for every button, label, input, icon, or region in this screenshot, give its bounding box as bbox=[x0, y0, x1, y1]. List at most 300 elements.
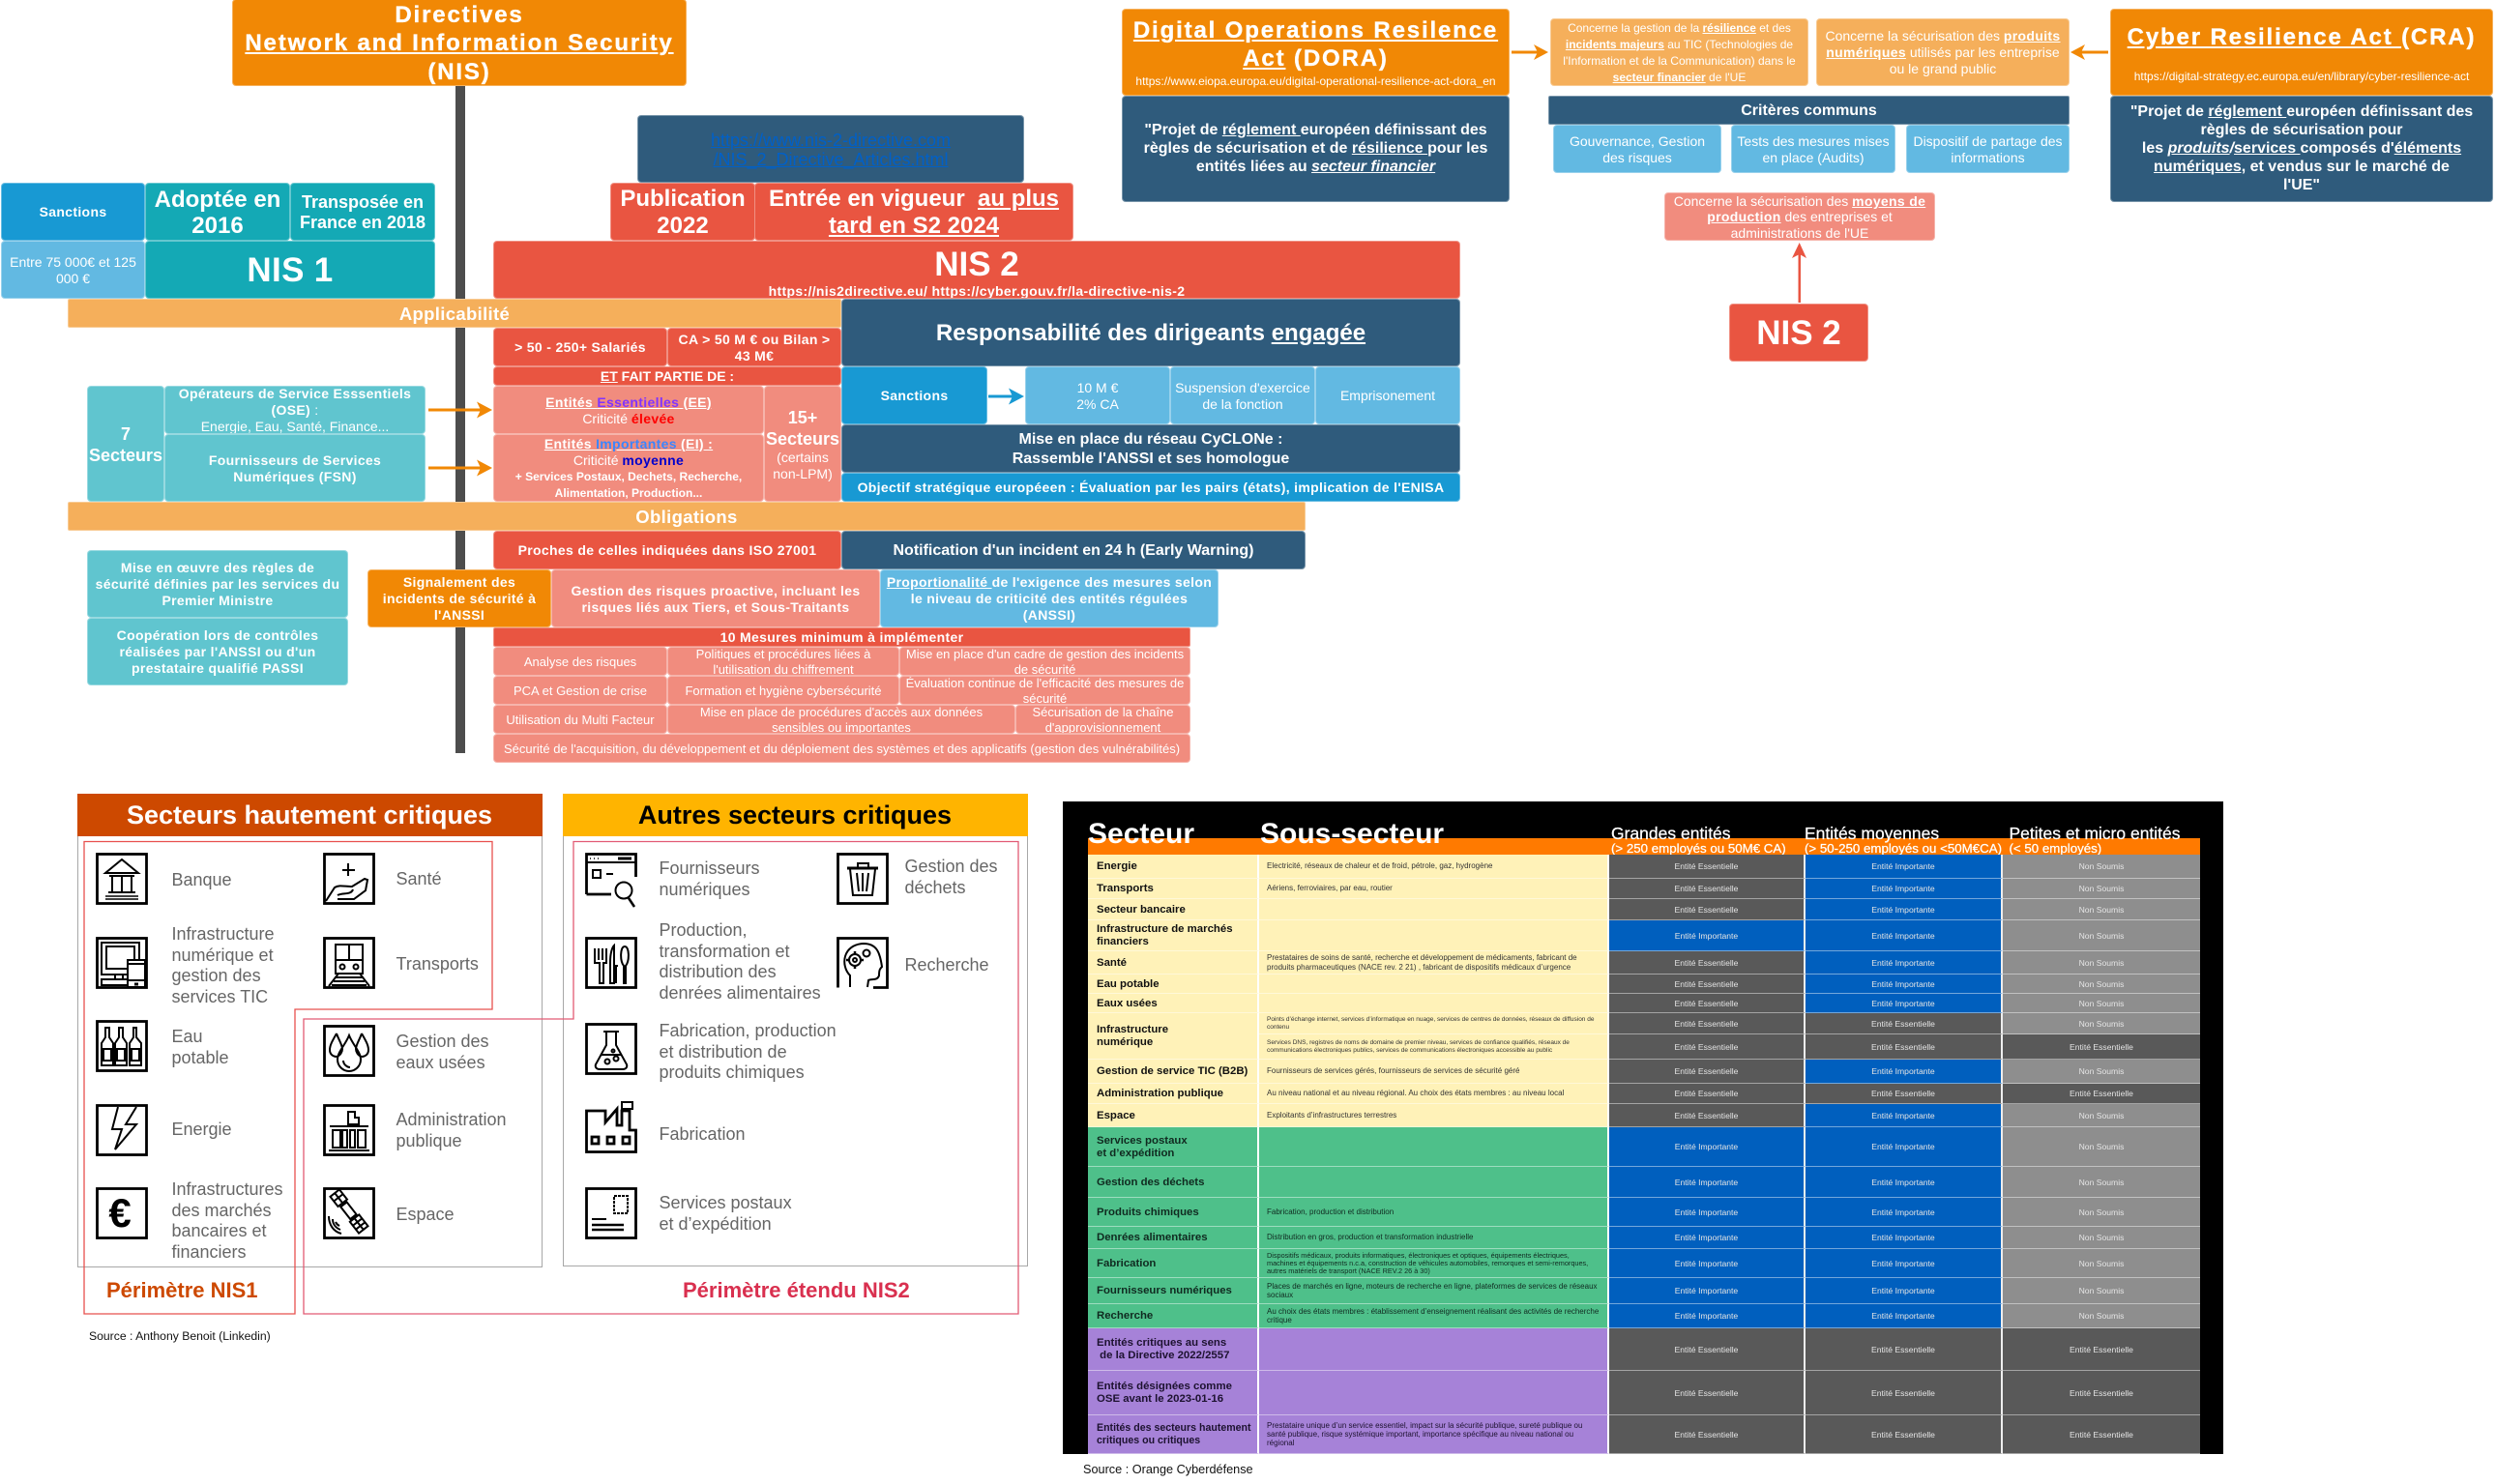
label: food production: distribution des bbox=[660, 962, 777, 981]
measure 4: PCA et Gestion de crise bbox=[514, 683, 647, 698]
CyCLONe network: Rassemble l'ANSSI et ses homologue bbox=[1013, 451, 1289, 466]
measure 10: Sécurité de l'acquisition, du développement et du déploiement des systèmes et des applicatifs (gestion des vulnérabilités) bbox=[504, 741, 1180, 756]
NIS 1 sanction amount: Entre 75 000€ et 125 000 € bbox=[10, 253, 136, 286]
NIS 2 badge bbox=[1729, 304, 1868, 362]
row: banking: Entité Importante bbox=[1871, 905, 1935, 915]
panel heading bbox=[563, 793, 1027, 835]
header: medium entities: (> 50-250 employés ou <50M€CA) bbox=[1805, 841, 2002, 856]
arrow: FSN to important entities bbox=[428, 460, 492, 476]
row: critical entities: Entité Essentielle bbox=[2070, 1344, 2133, 1353]
obligation: ANSSI controls: Coopération lors de contrôles bbox=[117, 627, 318, 643]
outline: NIS2 extended scope bbox=[304, 841, 1018, 1314]
row: designated OSE: Entités désignées comme bbox=[1097, 1381, 1232, 1392]
row: energy: Non Soumis bbox=[2079, 861, 2124, 871]
row: digital providers: Entité Importante bbox=[1871, 1286, 1935, 1295]
measure 1: Analyse des risques bbox=[524, 654, 636, 669]
OSE: Energie, Eau, Santé, Finance... bbox=[201, 419, 389, 434]
header: sector: Secteur bbox=[1088, 818, 1194, 850]
label: food production bbox=[660, 920, 821, 1003]
NIS 2 sanctions heading: Sanctions bbox=[881, 388, 948, 403]
row: financial market infrastructure: Non Soumis bbox=[2079, 930, 2124, 940]
strategic objective bbox=[841, 473, 1460, 502]
icon: factory bbox=[585, 1101, 637, 1153]
row: postal services: Services postaux bbox=[1097, 1135, 1188, 1147]
DORA description bbox=[1122, 96, 1510, 202]
measure 10 bbox=[493, 734, 1190, 763]
row: drinking water: Non Soumis bbox=[2079, 978, 2124, 988]
obligation: risk management: risques liés aux Tiers, et Sous-Traitants bbox=[581, 599, 850, 615]
label: financial infrastructures bbox=[172, 1179, 283, 1262]
icon: computer bbox=[96, 937, 148, 989]
obligation: PM rules: sécurité définies par les services du bbox=[96, 576, 339, 592]
CyCLONe network bbox=[841, 424, 1460, 473]
row: waste: Entité Importante bbox=[1675, 1178, 1738, 1187]
sanction: suspension: Suspension d'exercice de la fonction bbox=[1175, 379, 1310, 412]
FSN bbox=[164, 434, 426, 502]
CRA scope: numériques utilisés par les entreprise bbox=[1826, 44, 2060, 60]
row: critical sector entities: Entité Essentielle bbox=[1871, 1429, 1935, 1439]
important entities: Entités Importantes (EI) : bbox=[544, 435, 713, 451]
link box: NIS 2 articles: /NIS_2_Directive_Articles.html bbox=[713, 149, 949, 168]
label: NIS1 scope: Périmètre NIS1 bbox=[106, 1278, 258, 1302]
important entities: + Services Postaux, Dechets, Recherche, bbox=[515, 470, 742, 483]
row: health: Prestataires de soins de santé, recherche et développement de médicaments, fabricant de produits pharmaceutiques (NACE rev. 2 21) , fabricant de dispositifs médicaux d’urgence bbox=[1267, 953, 1577, 971]
NIS 2 badge: NIS 2 bbox=[1756, 313, 1841, 352]
applicability: and belongs to bbox=[493, 366, 841, 386]
obligation: ANSSI controls: réalisées par l'ANSSI ou d'un bbox=[120, 644, 315, 659]
NIS 1 sanction amount bbox=[1, 241, 145, 299]
label: digital infrastructure: gestion des bbox=[172, 966, 261, 985]
15+ sectors: (certains bbox=[777, 449, 829, 464]
row: chemicals bbox=[1088, 1198, 2200, 1227]
row: transport bbox=[1088, 879, 2200, 899]
obligation: proportionality: le niveau de criticité des entités régulées bbox=[911, 591, 1188, 606]
row: food: Denrées alimentaires bbox=[1097, 1232, 1208, 1243]
arrow: OSE to essential entities bbox=[428, 402, 492, 418]
label: financial infrastructures: Infrastructures bbox=[172, 1179, 283, 1199]
measure 9 bbox=[1015, 705, 1190, 734]
header: large entities bbox=[1611, 824, 1786, 856]
row: ICT management: Non Soumis bbox=[2079, 1066, 2124, 1076]
DORA heading: Act (DORA) bbox=[1243, 45, 1389, 72]
row: digital infrastructure 1 bbox=[1088, 1013, 2200, 1060]
row: waste: Non Soumis bbox=[2079, 1178, 2124, 1187]
row: food: Entité Importante bbox=[1871, 1233, 1935, 1242]
row: health: Entité Importante bbox=[1871, 957, 1935, 967]
row: transport: Aériens, ferroviaires, par eau, routier bbox=[1267, 884, 1393, 892]
criterion: sharing bbox=[1906, 125, 2070, 173]
row: chemicals: Non Soumis bbox=[2079, 1207, 2124, 1216]
banner: Applicabilité bbox=[68, 299, 841, 328]
15+ sectors bbox=[764, 386, 841, 502]
row: research: Entité Importante bbox=[1871, 1311, 1935, 1321]
row: manufacturing: Dispositifs médicaux, produits informatiques, électroniques et optiques, équipements électriques, machines et équipements n.c.a, construction de véhicules automobiles, remorques et semi-remorques, autres matériels de transport (NACE REV.2 26 à 30) bbox=[1267, 1251, 1588, 1274]
row: ICT management: Fournisseurs de services gérés, fournisseurs de services de sécurité géré bbox=[1267, 1066, 1519, 1075]
sanction: fine: 2% CA bbox=[1076, 396, 1119, 412]
row: postal services bbox=[1088, 1127, 2200, 1167]
icon: trash bin bbox=[837, 853, 889, 905]
15+ sectors: non-LPM) bbox=[773, 466, 833, 481]
panel heading: Secteurs hautement critiques bbox=[127, 800, 492, 829]
obligation: PM rules: Mise en œuvre des règles de bbox=[121, 560, 314, 575]
row: drinking water: Entité Importante bbox=[1871, 978, 1935, 988]
row: waste water bbox=[1088, 994, 2200, 1013]
row: postal services: Entité Importante bbox=[1675, 1142, 1738, 1151]
row: digital providers: Fournisseurs numériques bbox=[1097, 1285, 1232, 1296]
CRA description: l'UE" bbox=[2283, 177, 2320, 193]
DORA heading: https://www.eiopa.europa.eu/digital-operational-resilience-act-dora_en bbox=[1135, 74, 1496, 88]
header: large entities: Grandes entités bbox=[1611, 824, 1731, 843]
sanction: suspension bbox=[1170, 366, 1315, 424]
label: waste water: eaux usées bbox=[396, 1053, 485, 1072]
row: manufacturing: Entité Importante bbox=[1675, 1259, 1738, 1268]
panel heading bbox=[77, 793, 542, 835]
DORA description: "Projet de réglement européen définissant des règles de sécurisation et de résilience pour les entités liées au secteur financier bbox=[1144, 122, 1487, 175]
criterion: audits: Tests des mesures mises en place (Audits) bbox=[1737, 133, 1890, 164]
row: critical sector entities: Entité Essentielle bbox=[1675, 1429, 1738, 1439]
label: drinking water: potable bbox=[172, 1048, 229, 1067]
row: financial market infrastructure: Entité Importante bbox=[1675, 930, 1738, 940]
NIS 1 transposition date bbox=[290, 183, 435, 241]
row: critical entities: Entité Essentielle bbox=[1675, 1344, 1738, 1353]
icon: bank bbox=[96, 853, 148, 905]
leaders responsibility bbox=[841, 299, 1460, 366]
row: waste: Gestion des déchets bbox=[1097, 1177, 1204, 1188]
row: space: Espace bbox=[1097, 1110, 1135, 1121]
row: critical entities: Entité Essentielle bbox=[1871, 1344, 1935, 1353]
label: health: Santé bbox=[396, 869, 442, 888]
row: digital infrastructure 2: Entité Essentielle bbox=[1675, 1042, 1738, 1052]
label: drinking water: Eau bbox=[172, 1027, 203, 1046]
NIS 2 scope: Concerne la sécurisation des moyens de production des entreprises et administrations de l'UE bbox=[1674, 193, 1925, 241]
row: ICT management: Entité Essentielle bbox=[1675, 1066, 1738, 1076]
applicability: turnover bbox=[667, 328, 841, 366]
row: banking bbox=[1088, 899, 2200, 920]
label: chemicals bbox=[660, 1021, 837, 1082]
label: transport: Transports bbox=[396, 954, 479, 974]
CRA scope: ou le grand public bbox=[1890, 61, 1996, 76]
panel heading: Autres secteurs critiques bbox=[638, 800, 952, 829]
row: transport: Entité Essentielle bbox=[1675, 884, 1738, 893]
header: medium entities bbox=[1805, 824, 2002, 856]
obligation: reporting to ANSSI bbox=[367, 569, 551, 627]
row: waste: Entité Importante bbox=[1871, 1178, 1935, 1187]
icon: chemistry flask bbox=[585, 1023, 637, 1075]
label: drinking water bbox=[172, 1027, 229, 1067]
row: digital infrastructure 1: Entité Essentielle bbox=[1871, 1019, 1935, 1029]
obligation: 24 h notification bbox=[841, 531, 1306, 569]
NIS 2 heading with links bbox=[493, 241, 1460, 299]
row: digital providers: Non Soumis bbox=[2079, 1286, 2124, 1295]
NIS 2 heading with links: NIS 2 bbox=[934, 246, 1019, 283]
important entities bbox=[493, 434, 764, 502]
important entities: Alimentation, Production... bbox=[555, 485, 702, 499]
row: digital providers: Places de marchés en ligne, moteurs de recherche en ligne, plateformes de services de réseaux sociaux bbox=[1267, 1282, 1598, 1299]
row: public administration: Au niveau national et au niveau régional. Au choix des états membres : au niveau local bbox=[1267, 1089, 1564, 1097]
NIS 1 heading bbox=[145, 241, 435, 299]
measure 5 bbox=[667, 676, 899, 705]
label: digital providers: numériques bbox=[660, 880, 750, 899]
row: chemicals: Fabrication, production et distribution bbox=[1267, 1208, 1394, 1216]
source: Orange Cyberdéfense: Source : Orange Cyberdéfense bbox=[1083, 1463, 1253, 1476]
CRA heading: https://digital-strategy.ec.europa.eu/en/library/cyber-resilience-act bbox=[2134, 70, 2469, 83]
row: food: Distribution en gros, production et transformation industrielle bbox=[1267, 1233, 1473, 1241]
DORA heading: Digital Operations Resilence bbox=[1133, 17, 1498, 43]
label: financial infrastructures: bancaires et bbox=[172, 1221, 267, 1240]
label: waste management bbox=[905, 857, 998, 897]
DORA scope: secteur financier de l'UE bbox=[1613, 70, 1746, 83]
row: space: Exploitants d’infrastructures terrestres bbox=[1267, 1111, 1396, 1120]
measure 5: Formation et hygiène cybersécurité bbox=[685, 683, 882, 698]
measure 7 bbox=[493, 705, 667, 734]
row: digital providers bbox=[1088, 1278, 2200, 1304]
criterion: governance: des risques bbox=[1602, 149, 1672, 164]
row: chemicals: Entité Importante bbox=[1871, 1207, 1935, 1216]
CRA description: règles de sécurisation pour bbox=[2201, 122, 2402, 138]
title: Directives NIS: Network and Information Security bbox=[245, 30, 674, 56]
row: space: Entité Essentielle bbox=[1675, 1110, 1738, 1120]
row: health: Non Soumis bbox=[2079, 957, 2124, 967]
applicability: employees: > 50 - 250+ Salariés bbox=[514, 339, 646, 355]
row: ICT management: Gestion de service TIC (B2B) bbox=[1097, 1065, 1248, 1077]
row: drinking water bbox=[1088, 975, 2200, 994]
entity classification grid bbox=[1088, 855, 2200, 1454]
measures heading bbox=[493, 627, 1190, 647]
FSN: Numériques (FSN) bbox=[233, 468, 357, 483]
row: health: Santé bbox=[1097, 957, 1127, 969]
row: banking: Entité Essentielle bbox=[1675, 905, 1738, 915]
row: space bbox=[1088, 1104, 2200, 1127]
label: digital infrastructure: Infrastructure bbox=[172, 924, 275, 944]
row: waste water: Non Soumis bbox=[2079, 998, 2124, 1007]
title: Directives NIS: Directives bbox=[395, 2, 524, 28]
row: critical entities: de la Directive 2022/2557 bbox=[1100, 1350, 1229, 1361]
row: digital infrastructure 1: Entité Essentielle bbox=[1675, 1019, 1738, 1029]
row: health bbox=[1088, 951, 2200, 975]
essential entities: Criticité élevée bbox=[582, 410, 675, 425]
DORA scope: Concerne la gestion de la résilience et des bbox=[1568, 21, 1791, 35]
CRA heading bbox=[2110, 9, 2493, 96]
row: transport: Transports bbox=[1097, 883, 1154, 894]
row: critical entities bbox=[1088, 1328, 2200, 1371]
obligation: ANSSI controls: prestataire qualifié PASSI bbox=[132, 660, 304, 676]
row: manufacturing: Fabrication bbox=[1097, 1258, 1156, 1269]
obligation: PM rules: Premier Ministre bbox=[162, 593, 273, 608]
obligation: reporting to ANSSI: incidents de sécurité à bbox=[383, 591, 536, 606]
row: critical sector entities: Entités des secteurs hautement critiques ou critiques bbox=[1097, 1422, 1251, 1446]
row: research bbox=[1088, 1304, 2200, 1328]
measure 6 bbox=[899, 676, 1190, 705]
label: space: Espace bbox=[396, 1205, 455, 1224]
criterion: governance: Gouvernance, Gestion bbox=[1570, 133, 1705, 149]
row: financial market infrastructure bbox=[1088, 920, 2200, 951]
label: bank: Banque bbox=[172, 870, 232, 889]
measures heading: 10 Mesures minimum à implémenter bbox=[720, 629, 963, 645]
icon: euro: € bbox=[108, 1190, 132, 1236]
icon: euro bbox=[96, 1187, 148, 1239]
arrow: CRA to scope bbox=[2070, 44, 2108, 60]
row: designated OSE: OSE avant le 2023-01-16 bbox=[1097, 1393, 1223, 1405]
CRA description: "Projet de réglement européen définissant des bbox=[2130, 103, 2473, 120]
DORA heading bbox=[1122, 9, 1510, 96]
NIS 1 transposition date: Transposée en France en 2018 bbox=[300, 191, 426, 232]
sanction: prison: Emprisonement bbox=[1340, 388, 1435, 403]
CRA description bbox=[2110, 96, 2493, 202]
label: digital providers: Fournisseurs bbox=[660, 858, 760, 878]
icon: cutlery bbox=[585, 937, 637, 989]
row: drinking water: Eau potable bbox=[1097, 978, 1160, 990]
row: digital infrastructure 2 bbox=[1259, 1034, 2200, 1060]
link box: NIS 2 articles bbox=[637, 115, 1024, 183]
criterion: audits bbox=[1731, 125, 1895, 173]
row: financial market infrastructure: Entité Importante bbox=[1871, 930, 1935, 940]
header: small entities bbox=[2010, 824, 2181, 856]
CyCLONe network: Mise en place du réseau CyCLONe : bbox=[1019, 431, 1282, 447]
title: Directives NIS bbox=[232, 0, 687, 86]
row: digital infrastructure 2: Entité Essentielle bbox=[1871, 1042, 1935, 1052]
obligation: reporting to ANSSI: l'ANSSI bbox=[434, 607, 485, 623]
obligation: proportionality bbox=[880, 569, 1219, 627]
icon: head with gears bbox=[837, 937, 889, 989]
label: financial infrastructures: financiers bbox=[172, 1242, 247, 1262]
7 sectors: Secteurs bbox=[89, 445, 162, 464]
NIS 2 publication date: Publication 2022 bbox=[620, 186, 746, 238]
obligation: proportionality: Proportionalité de l'exigence des mesures selon bbox=[887, 574, 1212, 590]
label: waste water: Gestion des bbox=[396, 1032, 489, 1051]
essential entities bbox=[493, 386, 764, 434]
row: designated OSE bbox=[1088, 1371, 2200, 1415]
NIS 1 heading: NIS 1 bbox=[247, 251, 334, 288]
row: digital infrastructure 1: Non Soumis bbox=[2079, 1019, 2124, 1029]
sanction: prison bbox=[1315, 366, 1460, 424]
icon: water drops bbox=[323, 1025, 375, 1077]
applicability: employees bbox=[493, 328, 667, 366]
label: digital infrastructure: numérique et bbox=[172, 946, 274, 965]
row: energy: numérique bbox=[1097, 1036, 1153, 1048]
measure 7: Utilisation du Multi Facteur bbox=[506, 712, 655, 727]
row: critical sector entities: Entité Essentielle bbox=[2070, 1429, 2133, 1439]
sanction: fine bbox=[1025, 366, 1170, 424]
obligation: ISO 27001: Proches de celles indiquées dans ISO 27001 bbox=[518, 542, 816, 558]
row: chemicals: Produits chimiques bbox=[1097, 1207, 1199, 1218]
label: manufacturing: Fabrication bbox=[660, 1124, 746, 1144]
row: digital infrastructure 2: Services DNS, registres de noms de domaine de premier niveau, services de confiance qualifiés, réseaux de communications électroniques publics, services de communications électroniques accessible au public bbox=[1267, 1039, 1570, 1054]
row: public administration: Administration publique bbox=[1097, 1088, 1223, 1099]
header: large entities: (> 250 employés ou 50M€ CA) bbox=[1611, 841, 1786, 856]
arrow: sanctions to measures bbox=[988, 389, 1024, 404]
row: manufacturing: Entité Importante bbox=[1871, 1259, 1935, 1268]
NIS 1 sanctions heading: Sanctions bbox=[40, 204, 106, 219]
obligation: reporting to ANSSI: Signalement des bbox=[403, 574, 515, 590]
row: digital infrastructure 1: Infrastructure bbox=[1097, 1024, 1168, 1035]
row: critical entities: Entités critiques au sens bbox=[1097, 1337, 1226, 1349]
essential entities: Entités Essentielles (EE) bbox=[545, 394, 712, 410]
row: research: Au choix des états membres : établissement d’enseignement réalisant des activités de recherche critique bbox=[1267, 1307, 1599, 1324]
row: waste water: Entité Importante bbox=[1871, 998, 1935, 1007]
row: ICT management bbox=[1088, 1060, 2200, 1084]
row: manufacturing bbox=[1088, 1249, 2200, 1278]
label: energy: Energie bbox=[172, 1120, 232, 1139]
row: research: Entité Importante bbox=[1675, 1311, 1738, 1321]
row: designated OSE: Entité Essentielle bbox=[2070, 1388, 2133, 1398]
row: food: Non Soumis bbox=[2079, 1233, 2124, 1242]
criterion: sharing: Dispositif de partage des informations bbox=[1913, 133, 2063, 164]
banner: Obligations: Obligations bbox=[635, 507, 738, 527]
row: transport: Entité Importante bbox=[1871, 884, 1935, 893]
row: banking: Non Soumis bbox=[2079, 905, 2124, 915]
row: health: Entité Essentielle bbox=[1675, 957, 1738, 967]
row: critical sector entities: Prestataire unique d’un service essentiel, impact sur la sécurité publique, sureté publique ou santé publique, risque systémique important, importance spécifique au niveau national ou régional bbox=[1267, 1421, 1582, 1447]
row: banking: Secteur bancaire bbox=[1097, 904, 1186, 916]
table: sectors and entity classes bbox=[1063, 801, 2223, 1454]
7 sectors bbox=[87, 386, 164, 502]
label: postal services bbox=[660, 1193, 792, 1234]
row: critical sector entities bbox=[1088, 1415, 2200, 1454]
row: digital infrastructure 1: Points d’échange internet, services d’informatique en nuage, services de centres de données, réseaux de diffusion de contenu bbox=[1267, 1016, 1594, 1031]
OSE bbox=[164, 386, 426, 434]
row: transport: Non Soumis bbox=[2079, 884, 2124, 893]
row: waste water: Entité Essentielle bbox=[1675, 998, 1738, 1007]
title: Directives NIS: (NIS) bbox=[427, 59, 491, 85]
label: NIS2 extended scope: Périmètre étendu NIS2 bbox=[683, 1278, 910, 1302]
row: waste water: Eaux usées bbox=[1097, 998, 1158, 1009]
obligation: ANSSI controls bbox=[87, 618, 348, 685]
15+ sectors: Secteurs bbox=[766, 429, 839, 449]
row: chemicals: Entité Importante bbox=[1675, 1207, 1738, 1216]
row: research: Non Soumis bbox=[2079, 1311, 2124, 1321]
timeline vertical bar bbox=[455, 86, 465, 753]
icon: bottles bbox=[96, 1020, 148, 1072]
applicability: turnover: 43 M€ bbox=[735, 348, 774, 364]
icon: healthcare hand bbox=[323, 853, 375, 905]
row: waste bbox=[1088, 1167, 2200, 1198]
row: drinking water: Entité Essentielle bbox=[1675, 978, 1738, 988]
label: chemicals: produits chimiques bbox=[660, 1062, 805, 1082]
outline: NIS1 scope bbox=[84, 841, 492, 1314]
source: Anthony Benoit: Source : Anthony Benoit (Linkedin) bbox=[89, 1329, 271, 1343]
CRA heading: Cyber Resilience Act (CRA) bbox=[2128, 23, 2476, 50]
FSN: Fournisseurs de Services bbox=[209, 452, 381, 468]
row: postal services: Non Soumis bbox=[2079, 1142, 2124, 1151]
arrow: NIS 2 to scope bbox=[1792, 243, 1806, 303]
row: public administration: Entité Essentielle bbox=[2070, 1089, 2133, 1098]
measure 3 bbox=[899, 647, 1190, 676]
obligation: risk management: Gestion des risques proactive, incluant les bbox=[572, 582, 860, 597]
NIS 2 entry into force: Entrée en vigueur au plus tard en S2 2024 bbox=[769, 186, 1059, 238]
measure 2 bbox=[667, 647, 899, 676]
obligation: ISO 27001 bbox=[493, 531, 841, 569]
CRA scope bbox=[1816, 18, 2070, 86]
DORA scope bbox=[1550, 18, 1808, 86]
banner: Applicabilité: Applicabilité bbox=[399, 304, 510, 324]
common criteria heading: Critères communs bbox=[1741, 102, 1877, 119]
icon: satellite bbox=[323, 1187, 375, 1239]
row: financial market infrastructure: Infrastructure de marchés financiers bbox=[1097, 923, 1233, 947]
header: sub-sector: Sous-secteur bbox=[1260, 818, 1444, 850]
row: manufacturing: Non Soumis bbox=[2079, 1259, 2124, 1268]
label: chemicals: Fabrication, production bbox=[660, 1021, 837, 1040]
CRA description: numériques, et vendus sur le marché de bbox=[2154, 159, 2450, 175]
CRA description: les produits/services composés d'éléments bbox=[2142, 140, 2461, 157]
row: postal services: Entité Importante bbox=[1871, 1142, 1935, 1151]
label: chemicals: et distribution de bbox=[660, 1042, 787, 1062]
obligation: 24 h notification: Notification d'un incident en 24 h (Early Warning) bbox=[893, 542, 1253, 559]
panel: other critical sectors bbox=[563, 794, 1028, 1266]
7 sectors: 7 bbox=[121, 423, 131, 443]
applicability: and belongs to: ET FAIT PARTIE DE : bbox=[601, 368, 734, 384]
header: medium entities: Entités moyennes bbox=[1805, 824, 1939, 843]
label: financial infrastructures: des marchés bbox=[172, 1201, 272, 1220]
